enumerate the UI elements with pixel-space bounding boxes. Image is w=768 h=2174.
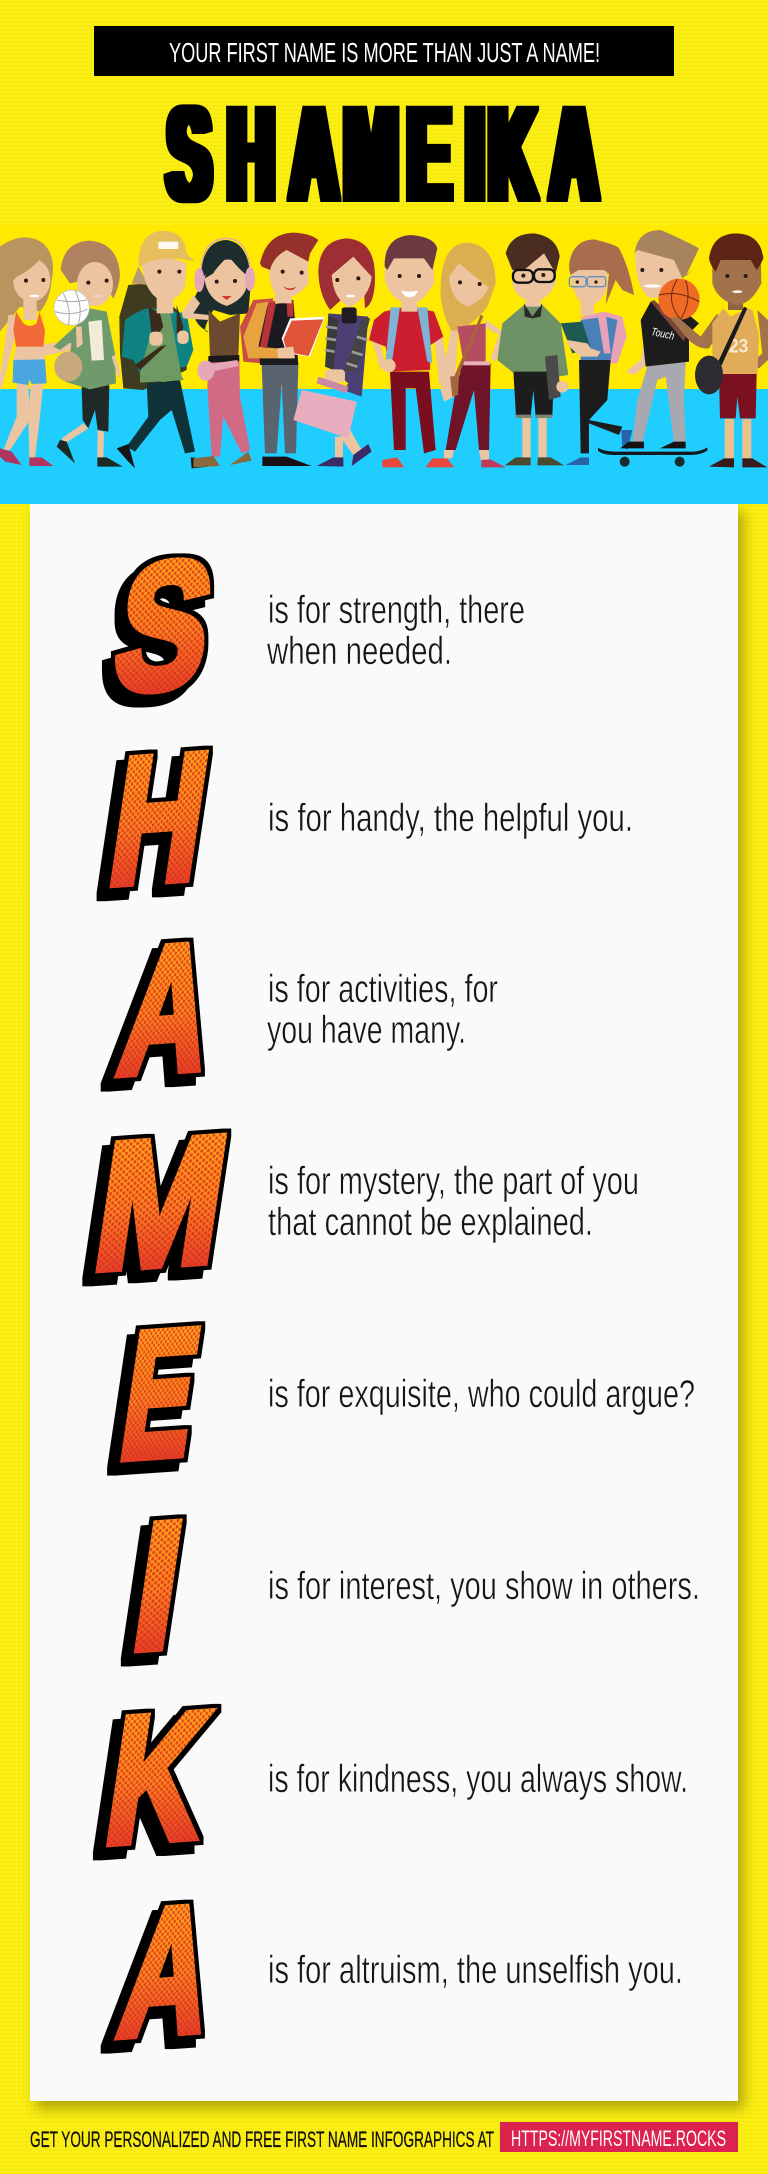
line: strength: when needed. <box>266 630 452 673</box>
letter A: A <box>110 1867 225 2075</box>
title: SHAMEIKA <box>168 80 597 229</box>
letter A: A <box>110 905 225 1113</box>
letter S: S <box>104 522 225 730</box>
person: girl with volleyball <box>53 241 123 467</box>
line: mystery: is for mystery, the part of you <box>268 1160 639 1203</box>
line: activities: is for activities, for <box>268 968 498 1011</box>
person: guy with glasses and green sweater <box>497 233 568 465</box>
line: handy: is for handy, the helpful you. <box>268 797 633 840</box>
person: red haired girl with pink bag <box>293 238 375 467</box>
person: blonde girl <box>441 243 506 467</box>
header banner <box>94 26 674 76</box>
line: mystery <box>268 1160 639 1244</box>
line: activities: you have many. <box>267 1009 466 1052</box>
illustration: backdrop <box>0 225 768 389</box>
line: activities <box>267 968 498 1052</box>
person: guy reading a book <box>240 233 325 466</box>
person: guy in red shirt <box>369 235 454 467</box>
person: skater with basketball: Touch <box>650 326 675 343</box>
person: skater with basketball <box>598 230 707 467</box>
letter K: K <box>95 1674 219 1882</box>
illustration: floor band <box>0 389 768 504</box>
person: girl with headphones <box>182 238 255 467</box>
letter M: M <box>84 1099 239 1308</box>
letter I: I <box>122 1485 194 1688</box>
person: hiker with cap and backpack <box>117 231 208 468</box>
line: strength <box>266 589 525 673</box>
line: strength: is for strength, there <box>268 589 525 632</box>
letter H: H <box>99 715 219 923</box>
letter E: E <box>111 1292 210 1497</box>
person: girl in orange top <box>0 237 82 466</box>
person: girl with ponytail and tablet <box>561 239 634 465</box>
line: mystery: that cannot be explained. <box>268 1201 593 1244</box>
person: guy in basketball jersey <box>671 233 768 467</box>
panel: white acrostic card <box>30 504 738 2101</box>
person: guy in basketball jersey: 23 <box>729 337 749 358</box>
